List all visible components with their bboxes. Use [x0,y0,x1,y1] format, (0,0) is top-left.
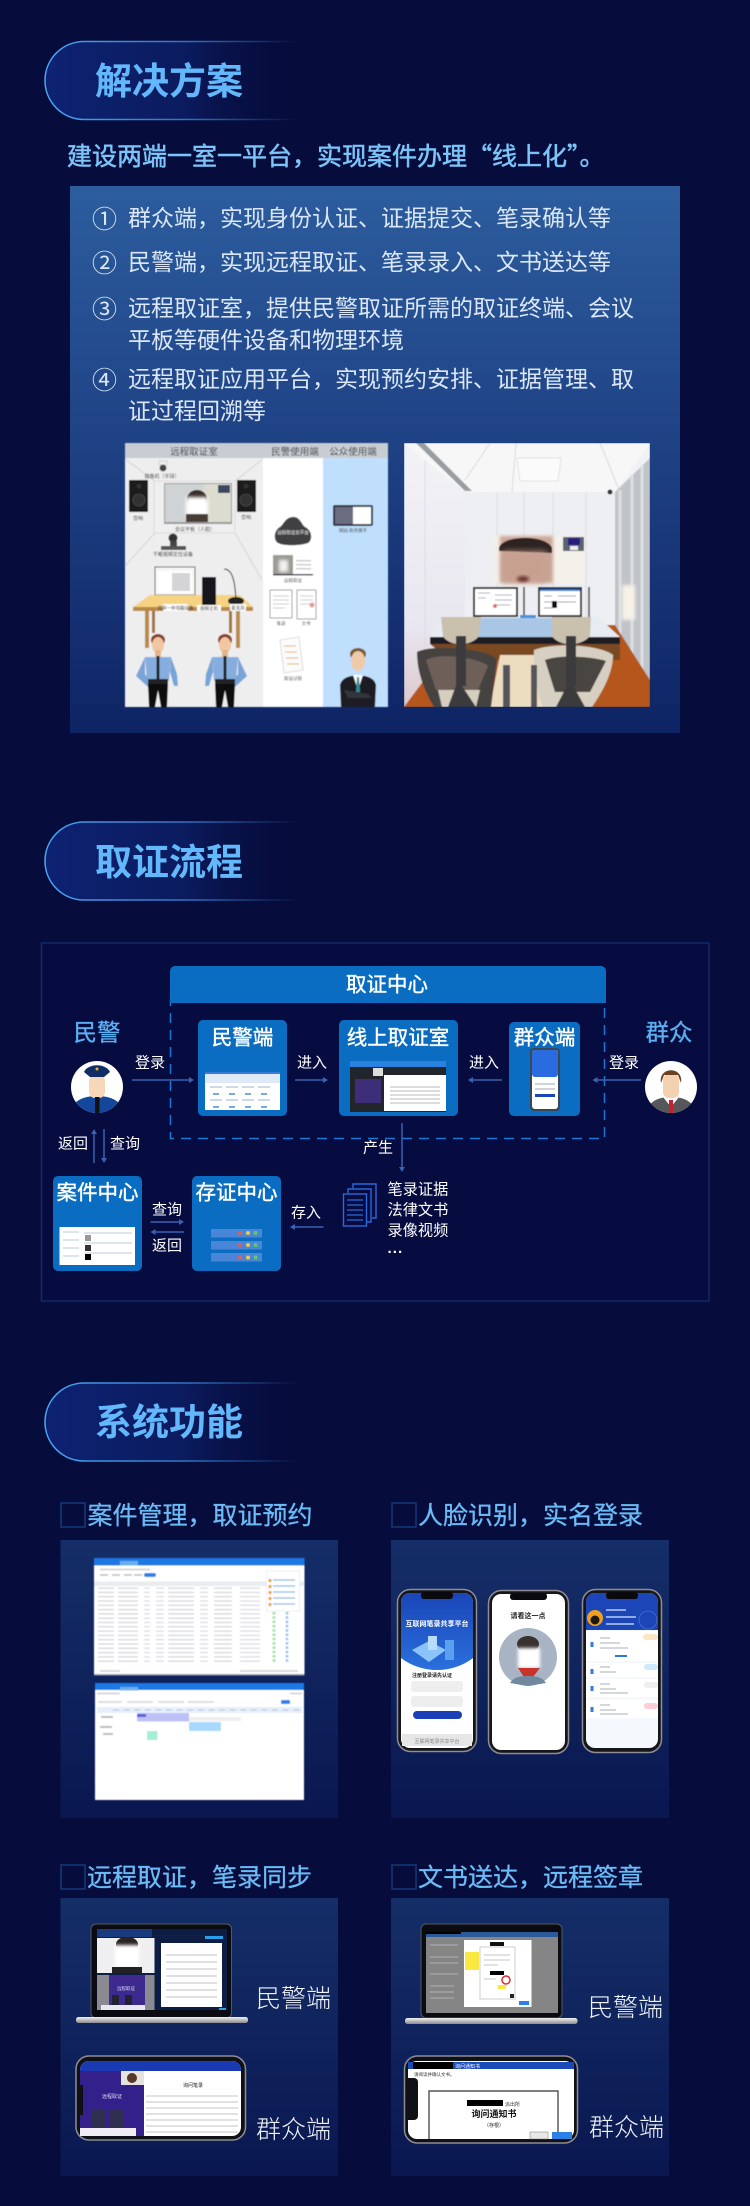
icon: ptz camera [153,534,193,558]
label: 民警端: 民警端 [256,1979,331,2015]
middle column thumbnails: 远程取证 [284,577,302,584]
box: 案件中心 [53,1176,142,1271]
arrows: 查询 返回 horizontal: 返回 [152,1234,182,1256]
middle column thumbnails: 取证过程 [284,675,302,682]
box: 群众端: 群众端 [514,1020,575,1050]
list item 4: 远程取证应用平台，实现预约安排、证据管理、取 [128,360,634,394]
feature: 人脸识别 [391,1496,669,1818]
feature: 远程取证 [60,1858,338,2176]
box: 群众端 [509,1020,580,1116]
arrow: 存入: 存入 [291,1202,321,1222]
list item 3: 远程取证室，提供民警取证所需的取证终端、会议 [128,289,634,323]
text: outputs: ... [388,1240,403,1257]
phone: citizen end: （存根） [484,2122,504,2129]
arrows: 返回 查询 vertical: 返回 [58,1132,88,1154]
tablet thumbnail [333,505,373,534]
middle column thumbnails: 文书 [302,620,311,627]
icon: cloud [275,517,311,545]
arrows: 查询 返回 horizontal: 查询 [152,1198,182,1220]
officer right [205,634,247,707]
arrow: 进入 right: 进入 [469,1052,499,1072]
list item 4 [92,360,634,426]
table with devices: 视频主机 [200,605,218,612]
arrows: 返回 查询 vertical [58,1129,140,1163]
diagram: room layout: 民警使用端 [271,444,319,458]
actor: 群众 [645,1020,697,1113]
text: outputs [388,1178,448,1257]
heading: 取证流程 [45,822,300,900]
phone: login: 互联网笔录共享平台 [406,1619,468,1629]
table with devices: 麦克风 [231,604,245,612]
phone: citizen end: 请阅读并确认文书。 [414,2071,454,2078]
box: 存证中心 [192,1176,281,1271]
list item 3: 平板等硬件设备和物理环境 [128,321,404,355]
office chairs [417,617,613,707]
icon: ptz camera: 千眼视频定位设备 [153,551,193,558]
actor: 民警: 民警 [74,1014,120,1048]
icon: speaker left: 音响 [133,515,143,522]
box: 案件中心: 案件中心 [56,1176,138,1206]
arrow: 民警 登录 [132,1052,194,1083]
list item 1: ① [92,200,117,236]
phone: citizen end: 询问通知书 [455,2063,480,2070]
actor: 群众: 群众 [646,1014,692,1048]
phone: citizen end: 远程取证 [102,2093,122,2100]
diagram: room layout: 远程取证室 [170,444,218,458]
arrow: 群众 登录 [592,1052,641,1083]
phone: login: 互联网笔录共享平台 [414,1738,460,1745]
phone: citizen end [404,2056,578,2143]
arrow: 进入 left [295,1052,328,1083]
screenshot: schedule [95,1683,304,1800]
text: outputs: 录像视频 [388,1218,448,1240]
feature heading: 人脸识别，实名登录 [418,1496,643,1532]
phone: citizen end [76,2056,246,2140]
list item 4: 证过程回溯等 [128,392,266,426]
desk and floor [404,615,650,707]
list item 2: ② [92,244,117,280]
list item 2: 民警端，实现远程取证、笔录录入、文书送达等 [128,243,611,277]
table with devices: 双屏一体电脑设备 [158,604,194,612]
box: 线上取证室: 线上取证室 [347,1020,449,1050]
phone: citizen end: 询问通知书 [471,2107,517,2120]
dashed frame [170,1000,604,1138]
feature heading: 远程取证，笔录同步 [87,1858,312,1894]
officer left [136,634,178,707]
heading: 系统功能: 系统功能 [95,1392,243,1446]
list item 3 [92,289,634,355]
header: 取证中心: 取证中心 [346,968,428,998]
actor: 民警 [71,1020,123,1113]
feature heading: 案件管理，取证预约 [88,1496,313,1532]
icon: dome camera: 摄像机（半球） [144,473,180,480]
icon: speaker right [237,480,256,521]
citizen figure [340,648,376,707]
header: 取证中心 [170,966,606,1003]
list item 4: ④ [92,361,117,397]
laptop: police end [76,1924,248,2023]
screenshot: case table [94,1558,304,1676]
heading: 系统功能 [45,1383,300,1461]
tablet thumbnail: 网站 政务微平 [339,527,367,534]
phone: task list [582,1590,662,1752]
icon: documents [344,1184,376,1226]
subtitle: 建设两端一室一平台，实现案件办理“线上化”。 [67,137,605,173]
panel: forensic flow [42,943,709,1301]
arrows: 查询 返回 horizontal [150,1198,184,1256]
video wall screen [494,536,585,583]
label: 民警端: 民警端 [588,1988,663,2024]
laptop: police end: 远程取证 [117,1985,135,1992]
arrow: 产生: 产生 [363,1136,393,1158]
laptops on desk [473,587,589,618]
label: 群众端: 群众端 [256,2110,331,2146]
icon: dome camera [144,461,180,480]
heading: 解决方案 [45,42,300,120]
box: 存证中心: 存证中心 [196,1176,278,1206]
text: outputs: 笔录证据 [388,1178,448,1200]
heading: 解决方案: 解决方案 [95,51,243,105]
arrow: 进入 right [468,1052,502,1083]
heading: 取证流程: 取证流程 [95,832,243,886]
panel: solution list [70,186,680,733]
arrow: 存入 [290,1202,324,1230]
icon: speaker left [129,480,148,522]
diagram: room layout [125,443,388,707]
phone: face scan: 请看这一点 [510,1611,546,1621]
feature heading: 文书送达，远程签章 [418,1858,643,1894]
label: 群众端: 群众端 [589,2108,664,2144]
feature: 案件管理 [60,1496,338,1818]
box: 民警端: 民警端 [212,1020,273,1050]
text: outputs: 法律文书 [388,1198,448,1220]
photo: evidence room [404,443,650,707]
phone: face scan [488,1590,568,1754]
box: 民警端 [198,1020,287,1116]
wall screen: 会议平板（人脸） [175,526,215,533]
icon: cloud: 远程取证云平台 [277,529,309,536]
arrow: 进入 left: 进入 [297,1052,327,1072]
box: 线上取证室 [339,1020,458,1116]
table with devices [133,567,253,648]
list item 1: 群众端，实现身份认证、证据提交、笔录确认等 [128,199,611,233]
phone: citizen end: 派出所 [505,2101,520,2108]
wall screen [154,481,235,533]
arrow: 民警 登录: 登录 [135,1052,165,1072]
arrow: 产生 [363,1123,405,1172]
diagram: room layout: 公众使用端 [329,444,377,458]
feature: 文书送达 [391,1858,669,2176]
phone: login [398,1590,476,1752]
phone: login: 注册登录请先认证 [412,1672,452,1679]
middle column thumbnails [270,555,316,682]
arrows: 返回 查询 vertical: 查询 [110,1132,140,1154]
list item 3: ③ [92,290,117,326]
middle column thumbnails: 笔录 [276,620,286,627]
phone: citizen end: 询问笔录 [183,2082,203,2089]
icon: speaker right: 音响 [241,514,251,521]
arrow: 群众 登录: 登录 [609,1052,639,1072]
laptop: police end [405,1924,578,2024]
